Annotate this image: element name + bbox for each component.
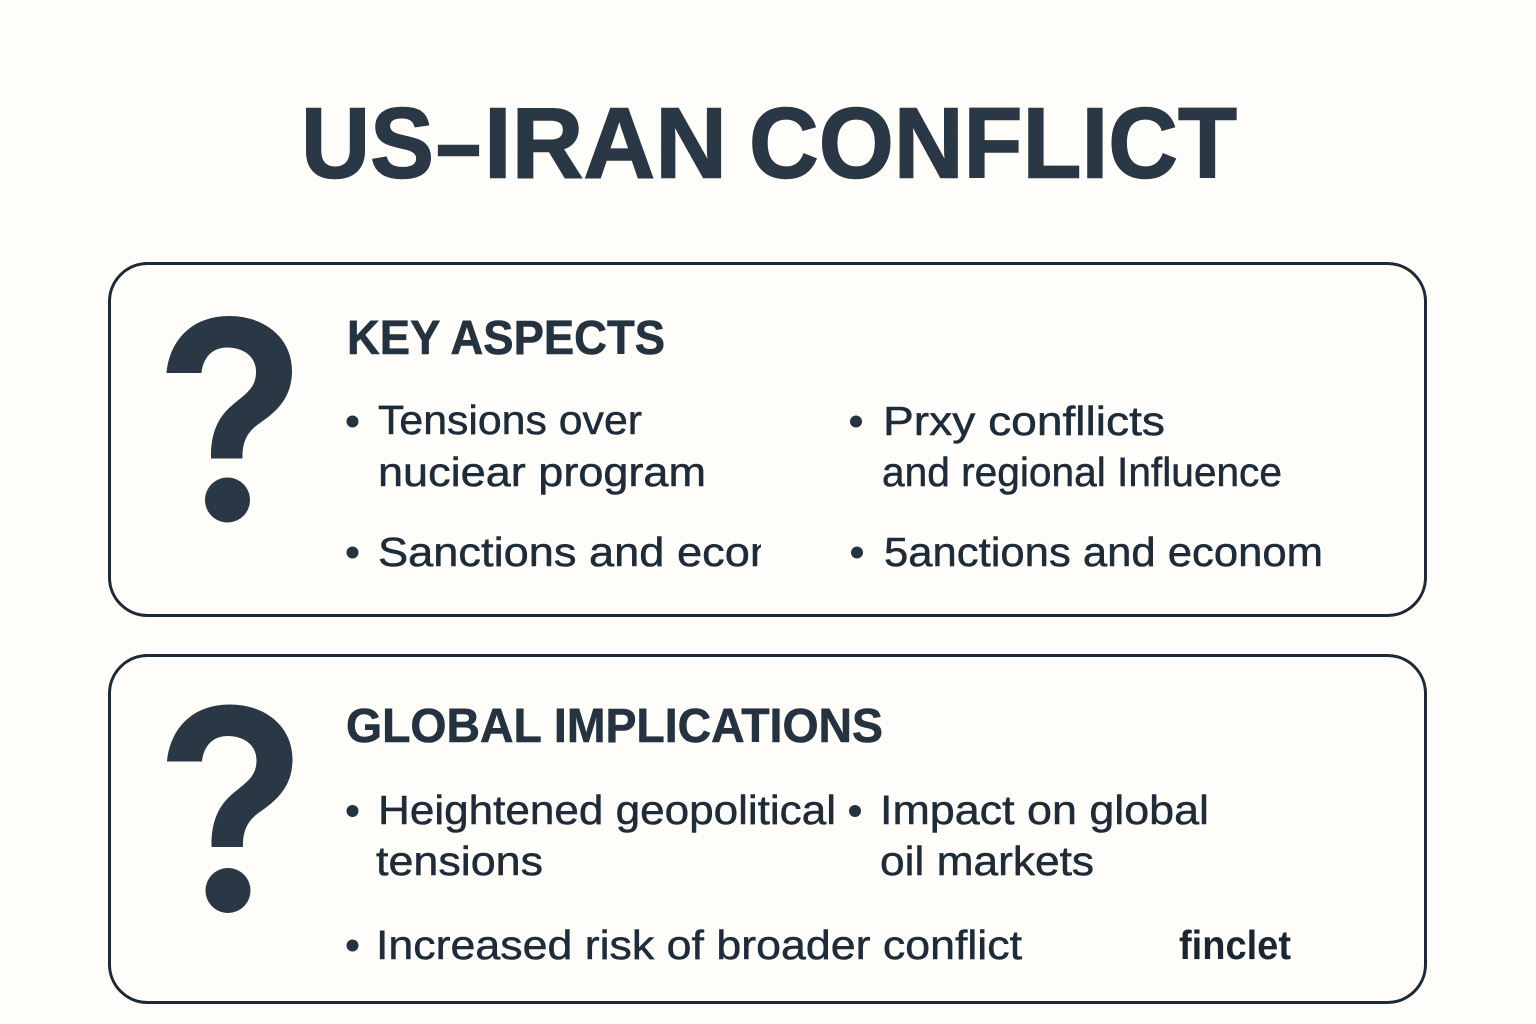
icon: question mark: [166, 316, 292, 522]
bullet: proxy conflicts: and regional Influence: [882, 449, 1282, 495]
bullet: nuclear program: Tensions over: [378, 397, 642, 443]
bullet: broader conflict: Increased risk of broader conflict: [376, 922, 1023, 968]
bullet: proxy conflicts: Prxy confllicts: [883, 398, 1165, 444]
bullet: oil markets: oil markets: [880, 838, 1094, 884]
bullet: sanctions left: [346, 536, 761, 567]
bullet: nuclear program: nuciear program: [378, 449, 706, 495]
bullet: oil markets: [849, 787, 1209, 884]
icon: question mark: [167, 704, 292, 913]
bullet: geopolitical tensions: tensions: [376, 838, 543, 884]
title: IRAN: [484, 88, 727, 200]
bullet: geopolitical tensions: Heightened geopolitical: [378, 787, 836, 833]
bullet: proxy conflicts: [850, 398, 1282, 495]
bullet: sanctions right: 5anctions and econom: [884, 529, 1323, 575]
title: US: [301, 88, 434, 200]
bullet: oil markets: Impact on global: [880, 787, 1209, 833]
title: –: [436, 88, 481, 200]
title: [301, 88, 1237, 200]
panel: key aspects: [110, 264, 1426, 616]
heading: global implications: GLOBAL IMPLICATIONS: [346, 700, 883, 753]
title: CONFLICT: [749, 88, 1237, 200]
panel: global implications: [110, 656, 1426, 1002]
logo text: finclet: [1179, 922, 1291, 968]
bullet: geopolitical tensions: [346, 787, 836, 884]
bullet: sanctions left: Sanctions and econ: [378, 529, 775, 575]
heading: key aspects: KEY ASPECTS: [347, 312, 665, 365]
bullet: nuclear program: [346, 397, 706, 495]
